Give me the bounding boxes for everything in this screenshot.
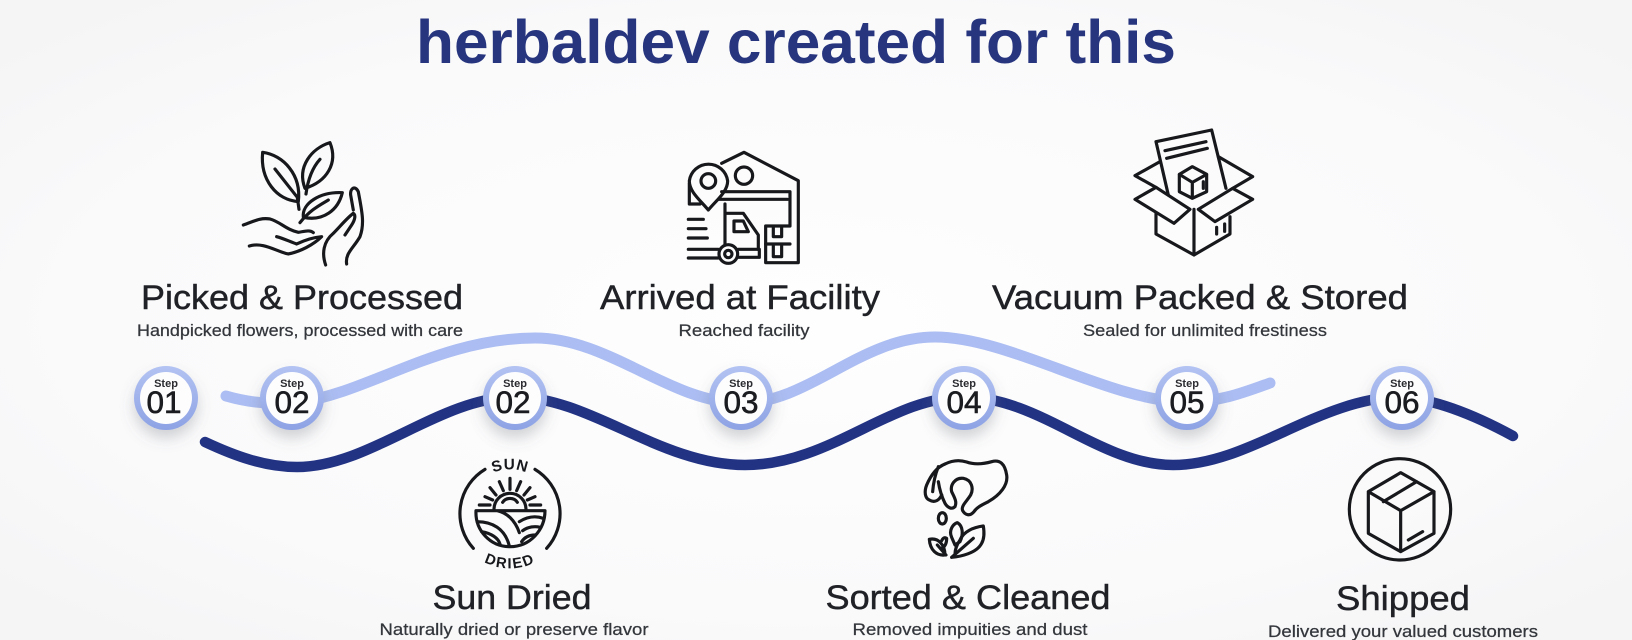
step marker 02 lower <box>483 366 547 430</box>
step marker 06: Step <box>1390 378 1414 390</box>
title: herbaldev created for this <box>416 8 1176 76</box>
icon: sun dried badge: SUN <box>492 458 528 472</box>
step marker 01: Step <box>154 378 178 390</box>
step marker 03 <box>709 366 773 430</box>
description: Picked & Processed: Handpicked flowers, processed with care <box>137 321 463 340</box>
icon: hand sorting seeds <box>925 461 1007 557</box>
icon: sun dried badge: DRIED <box>484 553 532 568</box>
icon: open box with vacuum pack <box>1135 130 1253 255</box>
heading: Sun Dried: Sun Dried <box>432 579 592 617</box>
step marker 05: 05 <box>1169 384 1205 420</box>
heading: Vacuum Packed & Stored: Vacuum Packed & Stored <box>992 279 1408 317</box>
description: Sorted & Cleaned: Removed impuities and dust <box>852 620 1088 639</box>
step marker 01 <box>134 366 198 430</box>
step marker 04: Step <box>952 378 976 390</box>
description: Vacuum Packed & Stored: Sealed for unlimited frestiness <box>1083 321 1327 340</box>
description: Sun Dried: Naturally dried or preserve flavor <box>380 620 649 639</box>
heading: Sorted & Cleaned: Sorted & Cleaned <box>826 579 1110 617</box>
description: Arrived at Facility: Reached facility <box>678 321 810 340</box>
icon: sun dried badge <box>458 458 562 568</box>
icon: hands holding plant <box>243 143 363 265</box>
step marker 05 <box>1155 366 1219 430</box>
heading: Arrived at Facility: Arrived at Facility <box>600 279 881 317</box>
icon: warehouse with truck and pin <box>688 152 798 263</box>
step marker 02 upper: Step <box>280 378 304 390</box>
icon: shipped box in circle <box>1349 459 1451 560</box>
step marker 02 upper <box>260 366 324 430</box>
heading: Picked & Processed: Picked & Processed <box>141 279 463 317</box>
step marker 04 <box>932 366 996 430</box>
step marker 03: Step <box>729 378 753 390</box>
heading: Shipped: Shipped <box>1336 580 1470 618</box>
light upper wave line <box>226 337 1270 403</box>
step marker 02 upper: 02 <box>274 384 310 420</box>
step marker 02 lower: 02 <box>495 384 531 420</box>
dark lower wave line <box>205 397 1513 467</box>
step marker 06: 06 <box>1384 384 1420 420</box>
step marker 05: Step <box>1175 378 1199 390</box>
step marker 04: 04 <box>946 384 982 420</box>
step marker 06 <box>1370 366 1434 430</box>
step marker 02 lower: Step <box>503 378 527 390</box>
step marker 03: 03 <box>723 384 759 420</box>
step marker 01: 01 <box>146 384 182 420</box>
